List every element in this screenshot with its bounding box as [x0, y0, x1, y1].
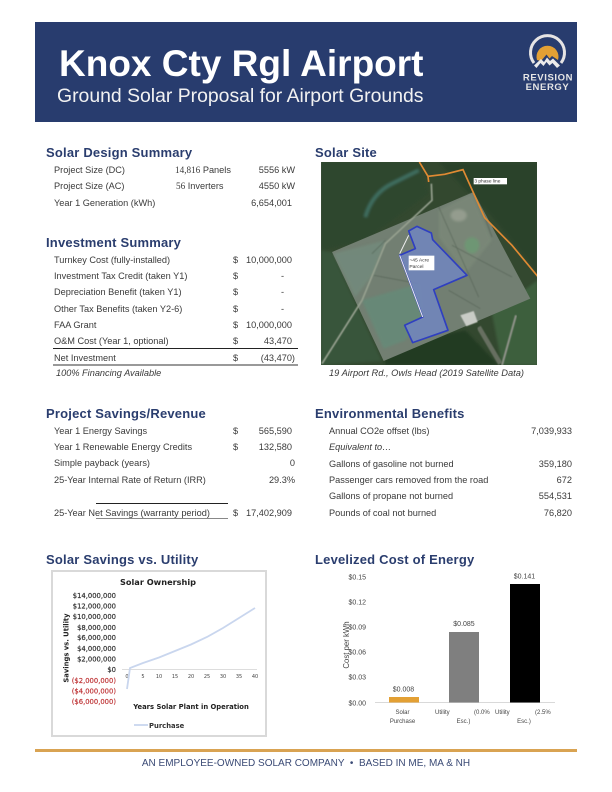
parcel polygon: [399, 226, 467, 342]
panel: project savings table: 25-Year Net Savings (warranty period): [54, 508, 210, 518]
panel: project savings table: $: [233, 442, 238, 452]
panel: investment summary table: Other Tax Benefits (taken Y2-6): [54, 304, 182, 314]
line chart: solar ownership: ($4,000,000): [72, 688, 116, 696]
panel: investment summary table: -: [281, 287, 284, 297]
panel: investment summary table: 100% Financing Available: [56, 368, 161, 378]
heading: Levelized Cost of Energy: Levelized Cost of Energy: [315, 552, 474, 567]
panel: project savings table: [54, 426, 295, 519]
panel: solar design summary table: Project Size (DC): [54, 165, 125, 175]
panel: project savings table: 17,402,909: [246, 508, 292, 518]
panel: investment summary table: -: [281, 271, 284, 281]
panel: solar design summary table: Year 1 Generation (kWh): [54, 198, 155, 208]
heading: Solar Savings vs. Utility: Solar Savings vs. Utility: [46, 552, 198, 567]
line chart: solar ownership: $6,000,000: [77, 634, 116, 642]
panel: solar design summary table: [54, 165, 295, 208]
line chart: solar ownership: 35: [236, 674, 242, 680]
bar chart: levelized cost of energy: $0.00: [348, 700, 366, 708]
heading: Investment Summary: Investment Summary: [46, 235, 181, 250]
line chart: solar ownership: 5: [141, 674, 145, 680]
bar chart: levelized cost of energy: $0.15: [348, 574, 366, 582]
line chart: solar ownership: ($6,000,000): [72, 698, 116, 706]
bar: solar purchase: $0.008: [393, 686, 414, 694]
bar chart: levelized cost of energy: Purchase: [390, 719, 416, 725]
panel: investment summary table: $: [233, 304, 238, 314]
panel: project savings table: 0: [290, 458, 295, 468]
line chart: solar ownership: 20: [188, 674, 194, 680]
panel: investment summary table: 43,470: [264, 336, 292, 346]
panel: project savings table: Year 1 Energy Savings: [54, 426, 147, 436]
heading: Solar Site: Solar Site: [315, 145, 377, 160]
bar chart: levelized cost of energy: $0.06: [348, 650, 366, 656]
bar chart: levelized cost of energy: $0.09: [348, 624, 366, 632]
header banner: [35, 22, 577, 122]
bar chart: levelized cost of energy: Cost per kWh: [342, 621, 351, 669]
bar chart: levelized cost of energy: Utility: [495, 710, 510, 716]
panel: environmental benefits table: Passenger cars removed from the road: [329, 475, 488, 485]
panel: solar design summary table: 4550 kW: [259, 181, 295, 191]
panel: project savings table: $: [233, 426, 238, 436]
panel: investment summary table: $: [233, 271, 238, 281]
panel: investment summary table: (43,470): [261, 353, 295, 363]
line chart: solar ownership: $2,000,000: [77, 656, 116, 664]
subtitle: Ground Solar Proposal for Airport Grounds: [57, 85, 423, 107]
panel: project savings table: 25-Year Internal Rate of Return (IRR): [54, 475, 206, 485]
bar chart: levelized cost of energy: $0.03: [348, 674, 366, 682]
panel: investment summary table: $: [233, 336, 238, 346]
panel: environmental benefits table: 554,531: [539, 491, 572, 501]
line chart: solar ownership: Years Solar Plant in Operation: [132, 703, 249, 711]
map caption: 19 Airport Rd., Owls Head (2019 Satellite Data): [329, 368, 524, 378]
bar: utility 2.5% escalation: $0.141: [514, 574, 535, 580]
bar chart: levelized cost of energy: Utility: [435, 710, 450, 716]
footer rule: [35, 749, 577, 752]
survey overlay: [332, 192, 530, 361]
line chart: solar ownership: $4,000,000: [77, 645, 116, 653]
panel: environmental benefits table: Gallons of propane not burned: [329, 491, 453, 501]
line chart: solar ownership: 25: [204, 674, 210, 680]
panel: solar design summary table: 14,816 Panels: [175, 165, 231, 175]
panel: environmental benefits table: 359,180: [539, 459, 572, 469]
panel: investment summary table: [53, 255, 298, 378]
panel: project savings table: 29.3%: [269, 475, 295, 485]
panel: solar design summary table: 5556 kW: [259, 165, 295, 175]
panel: project savings table: 565,590: [259, 426, 292, 436]
title: Knox Cty Rgl Airport: [59, 43, 424, 84]
panel: investment summary table: Investment Tax Credit (taken Y1): [54, 271, 187, 281]
panel: solar design summary table: 56 Inverters: [176, 181, 223, 191]
line chart: solar ownership: $14,000,000: [73, 592, 116, 600]
panel: project savings table: $: [233, 508, 238, 518]
panel: solar design summary table: Project Size (AC): [54, 181, 124, 191]
panel: environmental benefits table: 672: [557, 475, 572, 485]
bar chart: levelized cost of energy: Esc.): [517, 719, 531, 725]
parcel polygon: ~45 Acre: [409, 257, 429, 263]
bar chart: levelized cost of energy: (0.0%: [474, 710, 490, 716]
logo: Revision Energy: ENERGY: [526, 82, 569, 93]
panel: investment summary table: $: [233, 353, 238, 363]
panel: project savings table: Year 1 Renewable Energy Credits: [54, 442, 192, 452]
footer tagline: AN EMPLOYEE-OWNED SOLAR COMPANY • BASED IN ME, MA & NH: [142, 758, 470, 769]
heading: Environmental Benefits: Environmental Benefits: [315, 406, 465, 421]
bar: utility 0.0% escalation: $0.085: [453, 621, 475, 628]
panel: project savings table: 132,580: [259, 442, 292, 452]
bar chart: levelized cost of energy: [342, 573, 555, 725]
panel: investment summary table: Net Investment: [54, 353, 116, 363]
line chart: solar ownership: $12,000,000: [73, 602, 116, 610]
bar chart: levelized cost of energy: $0.12: [348, 600, 366, 606]
panel: investment summary table: 10,000,000: [246, 320, 292, 330]
panel: solar design summary table: 6,654,001: [251, 198, 292, 208]
bar chart: levelized cost of energy: Solar: [395, 710, 410, 716]
heading: Project Savings/Revenue: Project Savings/Revenue: [46, 406, 206, 421]
three phase line: 3 phase line: [474, 178, 500, 184]
map: satellite view of site: [321, 162, 537, 365]
line chart: solar ownership: Solar Ownership: [120, 577, 196, 587]
line chart: solar ownership: ($2,000,000): [72, 677, 116, 685]
logo: Revision Energy: [523, 34, 573, 93]
panel: investment summary table: Depreciation Benefit (taken Y1): [54, 287, 182, 297]
line chart: solar ownership: 40: [252, 674, 258, 680]
bar chart: levelized cost of energy: (2.5%: [535, 710, 551, 716]
line chart: solar ownership: $0: [107, 666, 116, 674]
heading: Solar Design Summary: Solar Design Summary: [46, 145, 192, 160]
panel: investment summary table: O&M Cost (Year 1, optional): [54, 336, 169, 346]
line chart: solar ownership: $8,000,000: [77, 624, 116, 632]
line chart: solar ownership: 30: [220, 674, 226, 680]
line chart: solar ownership: 10: [156, 674, 162, 680]
panel: investment summary table: $: [233, 255, 238, 265]
three phase line: [419, 162, 537, 276]
panel: investment summary table: FAA Grant: [54, 320, 96, 330]
panel: environmental benefits table: Pounds of coal not burned: [329, 508, 436, 518]
panel: investment summary table: $: [233, 320, 238, 330]
parcel polygon: Parcel: [409, 264, 423, 270]
line chart: solar ownership: [51, 570, 267, 737]
panel: investment summary table: Turnkey Cost (fully-installed): [54, 255, 170, 265]
panel: environmental benefits table: Annual CO2e offset (lbs): [329, 426, 429, 436]
panel: project savings table: Simple payback (years): [54, 458, 150, 468]
bar: solar purchase: [389, 686, 419, 702]
panel: environmental benefits table: 7,039,933: [531, 426, 572, 436]
bar: utility 2.5% escalation: [510, 574, 540, 702]
panel: investment summary table: $: [233, 287, 238, 297]
panel: environmental benefits table: Gallons of gasoline not burned: [329, 459, 454, 469]
panel: investment summary table: 10,000,000: [246, 255, 292, 265]
bar chart: levelized cost of energy: Esc.): [457, 719, 470, 725]
line chart: solar ownership: 15: [172, 674, 178, 680]
logo: Revision Energy: REVISION: [523, 72, 573, 84]
line chart: solar ownership: 0: [125, 674, 129, 680]
panel: investment summary table: -: [281, 304, 284, 314]
panel: environmental benefits table: 76,820: [544, 508, 572, 518]
line chart: solar ownership: $10,000,000: [73, 613, 116, 621]
line chart: solar ownership: Purchase: [149, 722, 185, 730]
panel: environmental benefits table: Equivalent to…: [329, 442, 391, 452]
bar: utility 0.0% escalation: [449, 621, 479, 702]
line chart: solar ownership: Savings vs. Utility: [62, 613, 70, 683]
panel: environmental benefits table: [329, 426, 572, 518]
